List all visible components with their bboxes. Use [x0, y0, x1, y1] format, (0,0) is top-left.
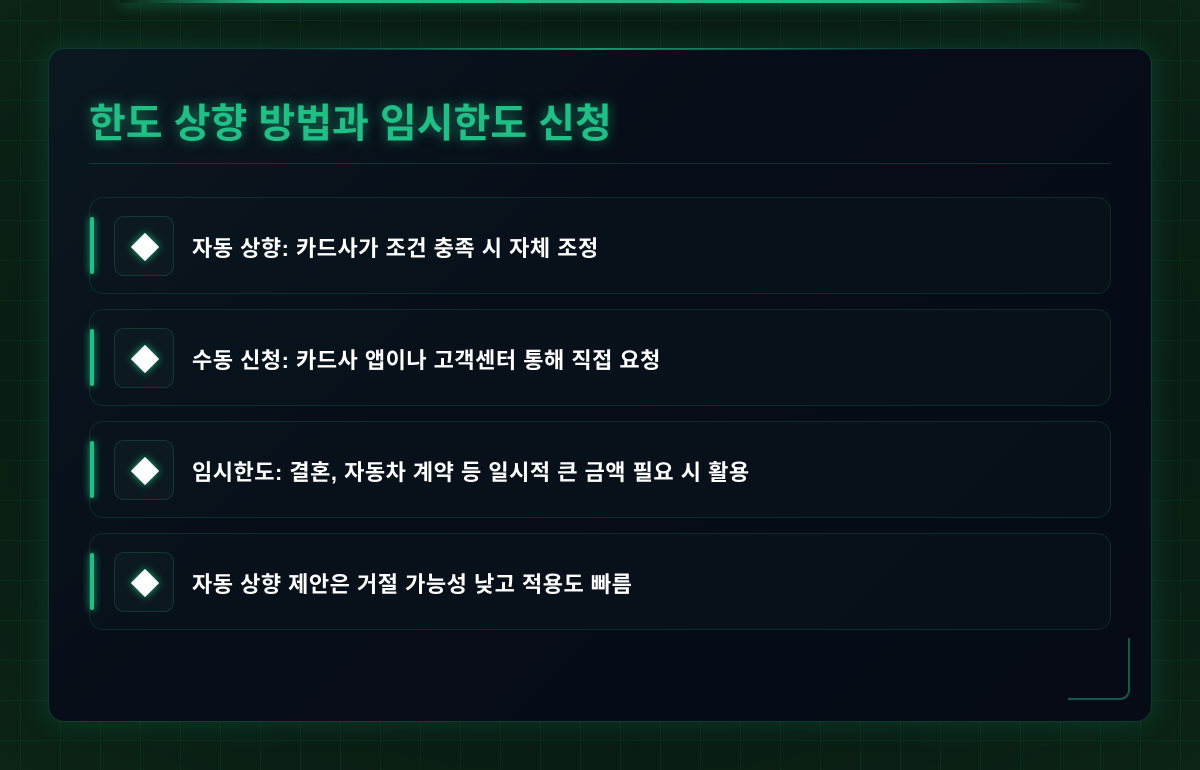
item 3	[89, 421, 1111, 518]
corner bracket	[1068, 638, 1130, 700]
item 1	[89, 197, 1111, 294]
text: item 3: 임시한도: 결혼, 자동차 계약 등 일시적 큰 금액 필요 시 활용	[192, 460, 750, 485]
icon: diamond	[114, 216, 174, 276]
icon: diamond	[114, 328, 174, 388]
item 4	[89, 533, 1111, 630]
text: item 4: 자동 상향 제안은 거절 가능성 낮고 적용도 빠름	[192, 572, 632, 597]
text: item 2: 수동 신청: 카드사 앱이나 고객센터 통해 직접 요청	[192, 348, 661, 373]
title: 한도 상향 방법과 임시한도 신청	[89, 102, 612, 146]
icon: diamond	[114, 552, 174, 612]
text: item 1: 자동 상향: 카드사가 조건 충족 시 자체 조정	[192, 236, 599, 261]
item 2	[89, 309, 1111, 406]
icon: diamond	[114, 440, 174, 500]
